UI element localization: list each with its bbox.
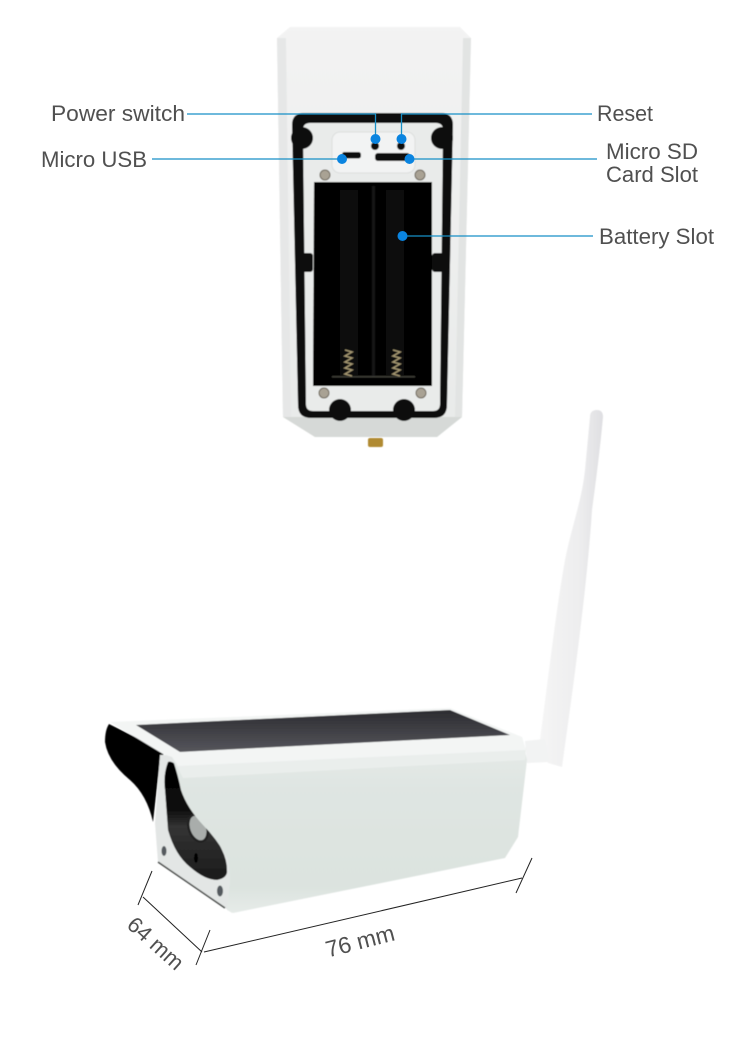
callout: micro USB <box>41 147 347 172</box>
callout: battery slot <box>398 224 714 249</box>
lower edge <box>158 862 225 908</box>
antenna <box>540 410 603 767</box>
inner plate <box>303 123 443 411</box>
dimension: 64 mm <box>122 871 210 975</box>
gasket <box>292 113 453 418</box>
screws <box>162 846 166 856</box>
gasket knobs <box>291 127 453 421</box>
dimension: 64 mm: 64 mm <box>122 912 189 975</box>
camera body <box>172 737 527 913</box>
housing <box>277 27 471 437</box>
buttons <box>371 142 379 150</box>
callout: micro USB: Micro USB <box>41 147 147 172</box>
micro USB port <box>342 152 361 158</box>
body highlight blend <box>176 748 526 778</box>
black hood <box>105 724 165 822</box>
front face <box>155 755 240 913</box>
IR sensor <box>194 853 198 863</box>
lens <box>185 812 211 844</box>
SD slot <box>375 153 410 161</box>
springs <box>345 350 400 376</box>
callout: power switch: Power switch <box>51 101 185 126</box>
callout: reset <box>396 101 653 144</box>
screws <box>319 170 426 398</box>
lens recess <box>164 762 227 880</box>
antenna connector <box>368 438 383 447</box>
callout: reset: Reset <box>597 101 653 126</box>
callout: micro SD card slot: Card Slot <box>606 162 698 187</box>
callout: battery slot: Battery Slot <box>599 224 714 249</box>
top frame <box>110 708 526 766</box>
callout: micro SD card slot: Micro SD <box>606 139 698 164</box>
port recess <box>332 132 415 173</box>
battery compartment <box>313 182 432 386</box>
antenna connector <box>525 739 549 763</box>
solar panel <box>136 710 510 752</box>
dimension: 76 mm <box>204 858 532 962</box>
camera back view <box>277 27 471 447</box>
dimension: 76 mm: 76 mm <box>323 920 397 962</box>
camera side view <box>105 410 603 913</box>
callout: micro SD card slot <box>404 139 698 187</box>
callout: power switch <box>51 101 380 144</box>
